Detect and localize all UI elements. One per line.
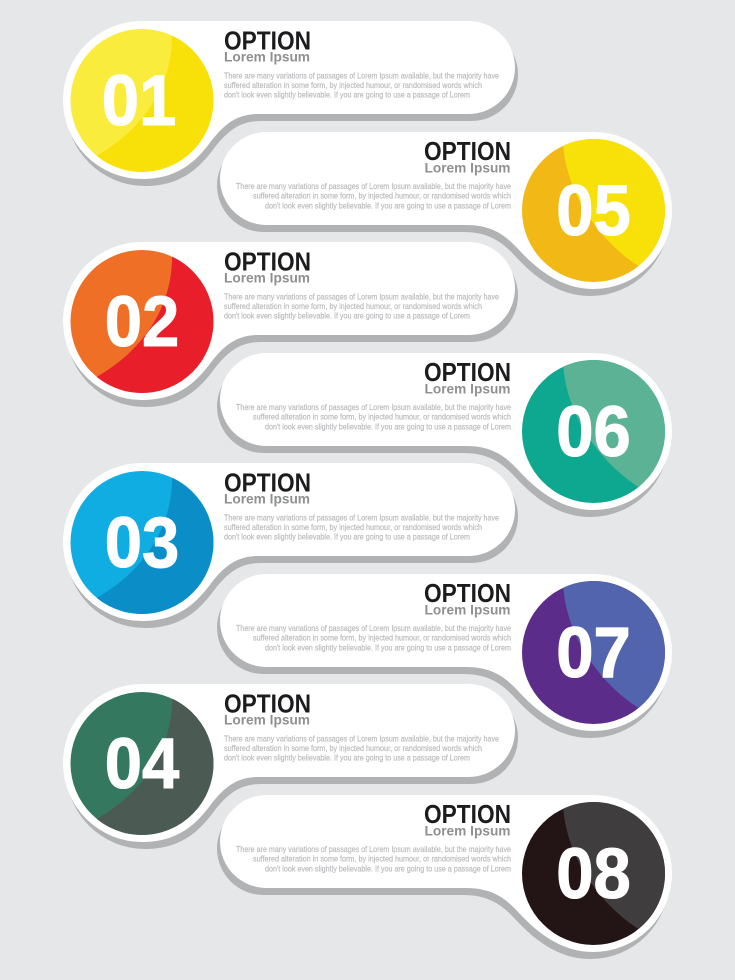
panel 05 — [220, 132, 672, 289]
number 07: 07 — [556, 613, 631, 692]
panel 07 — [220, 574, 672, 731]
body text 06 — [236, 403, 511, 431]
badge circle 07 — [522, 581, 665, 724]
body text 08: suffered alteration in some form, by injected humour, or randomised words which — [253, 855, 511, 864]
body text 01: don't look even slightly believable. If you are going to use a passage of Lorem — [224, 91, 470, 100]
body text 06: don't look even slightly believable. If you are going to use a passage of Lorem — [265, 422, 511, 431]
panel shadow 07 — [217, 581, 669, 738]
panel 03 — [63, 463, 515, 621]
subheading 07: Lorem Ipsum — [424, 603, 510, 618]
badge circle 01 — [70, 29, 214, 172]
body text 01: suffered alteration in some form, by injected humour, or randomised words which — [224, 81, 482, 90]
body text 04: There are many variations of passages of Lorem Ipsum available, but the majority have — [224, 734, 499, 743]
badge shade 07 — [563, 581, 665, 708]
number 08: 08 — [556, 834, 631, 913]
panel shadow 04 — [66, 691, 518, 849]
body text 04: suffered alteration in some form, by injected humour, or randomised words which — [224, 744, 482, 753]
panel shadow 01 — [66, 28, 518, 186]
option 07 — [217, 574, 672, 738]
body text 07: suffered alteration in some form, by injected humour, or randomised words which — [253, 634, 511, 643]
body text 07: There are many variations of passages of Lorem Ipsum available, but the majority have — [236, 624, 511, 633]
badge shade 04 — [97, 699, 213, 835]
body text 01: There are many variations of passages of Lorem Ipsum available, but the majority have — [224, 71, 499, 80]
body text 03: suffered alteration in some form, by injected humour, or randomised words which — [224, 523, 482, 532]
panel 04 — [63, 684, 515, 842]
option 03 — [63, 463, 518, 628]
body text 05: don't look even slightly believable. If you are going to use a passage of Lorem — [265, 201, 511, 210]
subheading 05: Lorem Ipsum — [424, 161, 510, 176]
subheading 03: Lorem Ipsum — [224, 492, 310, 507]
body text 05: There are many variations of passages of Lorem Ipsum available, but the majority have — [236, 182, 511, 191]
body text 04: don't look even slightly believable. If you are going to use a passage of Lorem — [224, 754, 470, 763]
panel shadow 06 — [217, 360, 669, 517]
heading 04: OPTION — [224, 690, 311, 718]
number 01: 01 — [102, 61, 176, 140]
body text 03: don't look even slightly believable. If you are going to use a passage of Lorem — [224, 533, 470, 542]
body text 03 — [224, 513, 499, 542]
panel 08 — [220, 795, 672, 952]
panel 02 — [63, 242, 515, 400]
badge shade 05 — [563, 139, 665, 266]
option 04 — [63, 684, 518, 849]
heading 03: OPTION — [224, 470, 311, 498]
body text 08: There are many variations of passages of Lorem Ipsum available, but the majority have — [236, 845, 511, 854]
body text 05: suffered alteration in some form, by injected humour, or randomised words which — [253, 192, 511, 201]
body text 08: don't look even slightly believable. If you are going to use a passage of Lorem — [265, 864, 511, 873]
option 01 — [63, 21, 518, 186]
subheading 01: Lorem Ipsum — [224, 50, 310, 65]
body text 05 — [236, 182, 511, 210]
badge shade 06 — [563, 360, 665, 487]
subheading 06: Lorem Ipsum — [424, 382, 510, 397]
badge shade 01 — [97, 36, 213, 172]
heading 05: OPTION — [424, 138, 511, 166]
body text 04 — [224, 734, 499, 763]
body text 07 — [236, 624, 511, 652]
option 02 — [63, 242, 518, 407]
panel shadow 05 — [217, 139, 669, 296]
badge shade 03 — [97, 478, 213, 614]
badge circle 02 — [70, 250, 214, 393]
body text 02 — [224, 292, 499, 321]
panel shadow 02 — [66, 249, 518, 407]
body text 06: suffered alteration in some form, by injected humour, or randomised words which — [253, 413, 511, 422]
option 05 — [217, 132, 672, 296]
panel 06 — [220, 353, 672, 510]
heading 01: OPTION — [224, 28, 311, 56]
number 02: 02 — [105, 282, 179, 361]
number 03: 03 — [105, 503, 179, 582]
heading 08: OPTION — [424, 801, 511, 829]
number 06: 06 — [556, 392, 631, 471]
body text 08 — [236, 845, 511, 873]
badge circle 08 — [522, 802, 665, 945]
body text 02: don't look even slightly believable. If you are going to use a passage of Lorem — [224, 312, 470, 321]
panel shadow 08 — [217, 802, 669, 959]
subheading 04: Lorem Ipsum — [224, 713, 310, 728]
badge circle 04 — [70, 692, 214, 835]
body text 07: don't look even slightly believable. If you are going to use a passage of Lorem — [265, 643, 511, 652]
body text 02: There are many variations of passages of Lorem Ipsum available, but the majority have — [224, 292, 499, 301]
number 05: 05 — [556, 171, 631, 250]
number 04: 04 — [105, 724, 180, 803]
heading 06: OPTION — [424, 359, 511, 387]
body text 01 — [224, 71, 499, 100]
badge circle 06 — [522, 360, 665, 503]
badge shade 02 — [97, 257, 213, 393]
body text 03: There are many variations of passages of Lorem Ipsum available, but the majority have — [224, 513, 499, 522]
badge circle 03 — [70, 471, 214, 614]
badge circle 05 — [522, 139, 665, 282]
subheading 02: Lorem Ipsum — [224, 271, 310, 286]
option 08 — [217, 795, 672, 959]
body text 02: suffered alteration in some form, by injected humour, or randomised words which — [224, 302, 482, 311]
option 06 — [217, 353, 672, 517]
panel 01 — [63, 21, 515, 179]
heading 07: OPTION — [424, 580, 511, 608]
subheading 08: Lorem Ipsum — [424, 824, 510, 839]
body text 06: There are many variations of passages of Lorem Ipsum available, but the majority have — [236, 403, 511, 412]
heading 02: OPTION — [224, 248, 311, 276]
badge shade 08 — [563, 802, 665, 929]
panel shadow 03 — [66, 470, 518, 628]
